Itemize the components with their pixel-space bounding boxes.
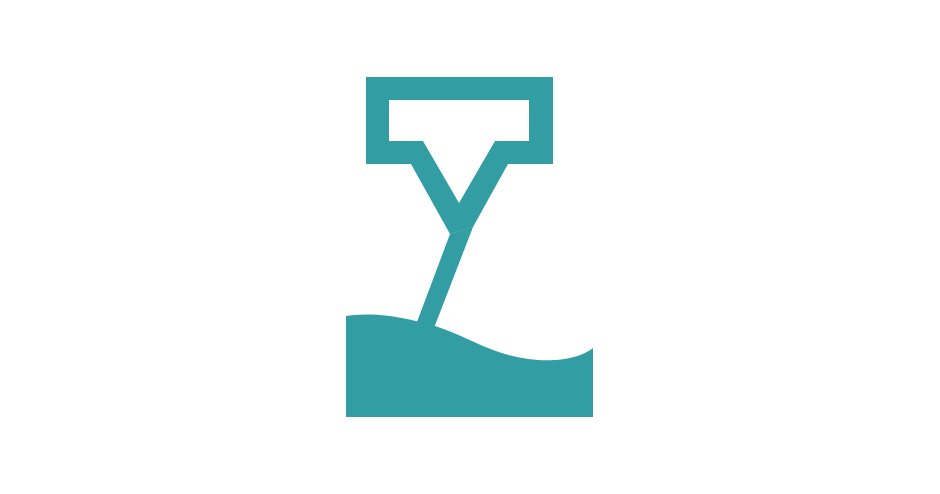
ground wave: [346, 315, 593, 417]
stem: [417, 227, 473, 328]
frame head: [366, 77, 553, 234]
